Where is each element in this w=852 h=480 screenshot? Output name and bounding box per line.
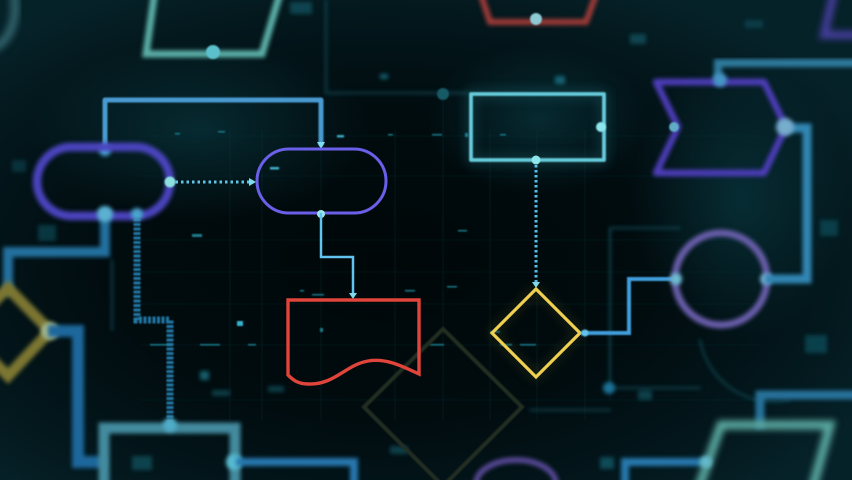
thin circuit lines xyxy=(112,0,790,410)
arrow head: into document xyxy=(349,293,357,299)
node: bottom right xyxy=(700,456,712,468)
node: left pill right xyxy=(164,176,176,188)
connector: circle to chevron xyxy=(770,128,807,279)
node: blue pill bottom xyxy=(317,210,325,218)
background glow: right xyxy=(630,60,850,340)
node: dotted start xyxy=(131,208,143,220)
arrow head: dotted connector xyxy=(249,178,256,186)
faded node xyxy=(437,88,449,100)
node: chevron right xyxy=(776,118,794,136)
node: upper left junction xyxy=(99,144,111,156)
purple chevron xyxy=(656,82,786,173)
cyan process box xyxy=(471,94,604,160)
connector: top parallelogram down xyxy=(210,50,216,98)
top red shape xyxy=(480,0,597,22)
connector: top line to blue pill xyxy=(105,100,321,150)
glow: cyan box xyxy=(471,94,604,160)
connector: right lower xyxy=(760,395,852,424)
arrow head: into blue pill xyxy=(317,142,325,149)
yellow diamond xyxy=(492,289,580,377)
connector: yellow diamond to circle xyxy=(583,279,672,333)
connector: blue pill to document xyxy=(321,214,353,293)
faded dashed connector xyxy=(442,96,444,328)
blue pill xyxy=(257,149,386,213)
connector: bottom right xyxy=(625,462,705,480)
grid xyxy=(140,90,760,420)
background glow: upper left xyxy=(30,40,370,220)
node: cyan box bottom xyxy=(532,156,540,164)
faded dark diamond xyxy=(364,329,522,480)
connector: top red shape to cyan box xyxy=(532,18,540,92)
top right purple shape xyxy=(824,0,852,35)
small sharp data specks xyxy=(150,131,536,346)
dotted connector: cyan box to yellow diamond xyxy=(534,160,538,282)
node: chevron left xyxy=(669,122,679,132)
node: lower box top xyxy=(163,418,177,432)
node: circle left xyxy=(670,273,682,285)
arrow head: into yellow diamond xyxy=(532,282,540,288)
connector: left diamond to lower box xyxy=(54,331,100,462)
background glow: upper right box xyxy=(427,45,647,195)
node: top parallelogram xyxy=(206,45,220,59)
connector: cyan box to chevron xyxy=(604,124,672,130)
purple circle xyxy=(675,233,767,325)
dotted connector: pill to pill xyxy=(170,180,250,184)
connector: lower box right xyxy=(240,462,354,480)
top parallelogram xyxy=(146,0,281,54)
node: left pill bottom xyxy=(97,206,113,222)
node: yellow diamond xyxy=(41,322,59,340)
connector: left pill to yellow diamond xyxy=(8,214,105,290)
connector: top right xyxy=(718,63,852,80)
red document shape xyxy=(288,300,419,384)
top left partial shape xyxy=(0,0,15,48)
node: lower right junction xyxy=(603,382,615,394)
glow: yellow diamond xyxy=(492,289,580,377)
node: cyan box right xyxy=(596,122,606,132)
bottom purple arc xyxy=(476,460,556,480)
node: lower box right xyxy=(226,454,242,470)
node: chevron top xyxy=(713,73,727,87)
lower left box xyxy=(104,428,235,480)
bottom right parallelogram xyxy=(698,425,830,480)
node: circle right xyxy=(760,273,772,285)
left yellow diamond xyxy=(0,288,50,376)
node: yellow diamond right xyxy=(582,330,588,336)
left purple pill xyxy=(37,147,170,216)
node: top red shape xyxy=(530,13,542,25)
dotted connector: left pill to lower box xyxy=(137,214,170,424)
